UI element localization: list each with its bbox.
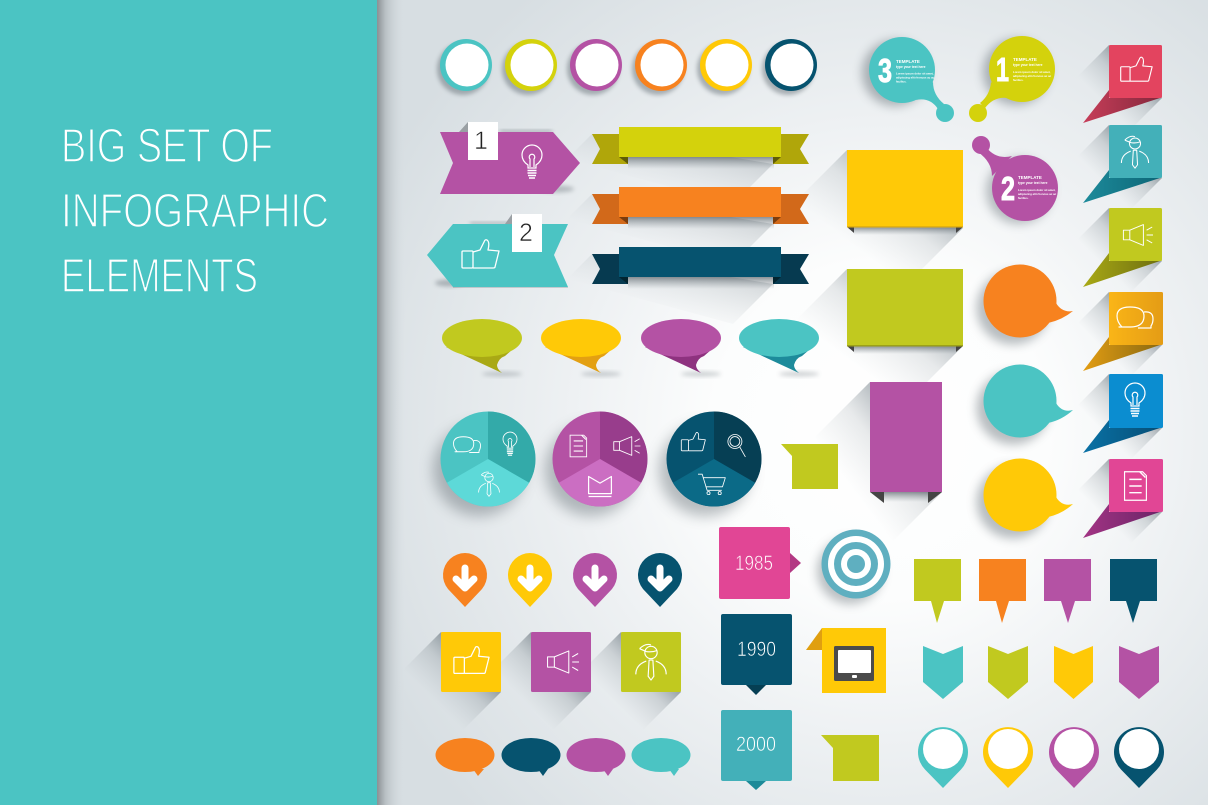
oval bubble: yellow <box>541 319 621 376</box>
icon: bulb <box>522 145 542 178</box>
marker: purple <box>1044 559 1091 623</box>
blob text 1: facilius. <box>1013 78 1024 82</box>
blob text 1: adipiscing elit rhoncus ac ac <box>1013 74 1052 78</box>
timeline card 1985 <box>719 527 801 599</box>
blob text 2: 2 <box>1001 170 1015 207</box>
title <box>61 120 329 303</box>
arrow pin row <box>443 553 682 607</box>
marker: lime <box>914 559 961 623</box>
square: speaker purple <box>531 632 591 692</box>
timeline card 2000 <box>721 710 792 790</box>
location pin: teal <box>918 727 968 788</box>
oval speech bubble row <box>442 319 819 376</box>
blob text 3: Lorem ipsum dolor sit amet, <box>896 72 934 76</box>
number card 2: 2 <box>519 219 533 247</box>
pin: yellow <box>508 553 552 607</box>
oval bubble: lime <box>442 319 522 376</box>
pie icons teal <box>454 432 517 496</box>
square: speaker lime <box>1077 208 1162 293</box>
blob text 3: type your text here <box>896 65 926 69</box>
blob text 1: type your text here <box>1013 63 1043 67</box>
lime flag bottom <box>821 735 879 781</box>
pin: purple <box>573 553 617 607</box>
small lime flag <box>781 444 838 489</box>
pin: navy <box>638 553 682 607</box>
arrow label 2 <box>427 214 568 288</box>
chevron badge row <box>923 646 1159 699</box>
icon squares with tails: right column <box>1077 45 1163 544</box>
blob text 1: Lorem ipsum dolor sit amet, <box>1013 70 1051 74</box>
pie icons purple <box>570 435 640 496</box>
pie circle: teal <box>433 412 536 516</box>
small bubble: orange <box>436 738 494 776</box>
panel: title panel <box>0 0 377 807</box>
circle: navy <box>762 39 817 95</box>
oval bubble: teal <box>739 319 819 376</box>
square: thumbs up red <box>1077 45 1162 130</box>
speech bubble: yellow round <box>976 458 1073 538</box>
blob: template 3 teal <box>862 37 954 122</box>
ribbon: navy <box>567 247 809 324</box>
speech bubble: teal round <box>976 364 1073 444</box>
chevron: lime <box>988 646 1028 699</box>
lime banner rectangle <box>792 269 963 401</box>
blob text 3: TEMPLATE <box>896 59 920 64</box>
oval bubble: purple <box>641 319 721 376</box>
small bubble: navy <box>502 738 560 776</box>
tablet card <box>806 628 886 693</box>
square: thumbs up yellow <box>441 632 501 692</box>
blob text 2: adipiscing elit rhoncus ac ac <box>1018 192 1057 196</box>
circle: yellow <box>697 39 752 95</box>
marker: orange <box>979 559 1026 623</box>
purple banner rectangle <box>815 382 942 547</box>
pie circle: purple <box>545 412 648 516</box>
small bubble: teal <box>632 738 690 776</box>
location pin: purple <box>1049 727 1099 788</box>
pie circle: navy <box>659 412 762 516</box>
blob text 2: TEMPLATE <box>1018 175 1042 180</box>
timeline card 1990: 1990 <box>737 638 776 661</box>
location pin: navy <box>1114 727 1164 788</box>
square: person teal <box>1077 125 1162 210</box>
speech bubble: orange round <box>976 264 1073 344</box>
blob text 2: type your text here <box>1018 181 1048 185</box>
icon: thumbs up <box>462 240 499 268</box>
small bubble: purple <box>566 738 626 776</box>
location pin row <box>918 727 1164 788</box>
timeline card 1985: 1985 <box>735 552 773 575</box>
title: INFOGRAPHIC <box>61 185 329 238</box>
blob text 1: 1 <box>996 51 1009 88</box>
ribbon: orange <box>567 187 809 264</box>
chevron: teal <box>923 646 963 699</box>
square speech marker row <box>914 559 1157 623</box>
marker: navy <box>1110 559 1157 623</box>
number card 2 <box>512 214 542 252</box>
circle: lime <box>502 39 557 95</box>
circle: purple <box>567 39 622 95</box>
square: person lime <box>621 632 681 692</box>
blob text 2 <box>1001 170 1057 207</box>
target icon <box>817 530 890 604</box>
circle: orange <box>632 39 687 95</box>
title: ELEMENTS <box>61 250 258 303</box>
blob text 2: Lorem ipsum dolor sit amet, <box>1018 188 1056 192</box>
blob text 1 <box>996 51 1052 88</box>
blob text 3: 3 <box>878 52 892 89</box>
arrow label 1 <box>440 122 580 194</box>
blob text 3 <box>878 52 935 89</box>
panel shadow <box>377 0 405 807</box>
small oval bubble row <box>436 738 690 776</box>
blob: template 1 lime <box>969 36 1055 122</box>
chevron: yellow <box>1054 646 1093 699</box>
number card 1: 1 <box>474 127 488 155</box>
square: document pink <box>1077 459 1163 544</box>
timeline card 1990 <box>721 614 792 695</box>
timeline card 2000: 2000 <box>736 733 776 756</box>
circle: teal <box>437 39 492 95</box>
circle row <box>437 39 817 95</box>
yellow banner rectangle <box>792 150 963 283</box>
title: BIG SET OF <box>61 120 273 173</box>
chevron: purple <box>1119 646 1159 699</box>
ribbon: lime <box>567 127 809 204</box>
blob text 2: facilius. <box>1018 196 1029 200</box>
pie icons navy <box>681 432 745 495</box>
square: chat orange <box>1077 292 1163 377</box>
square: bulb blue <box>1077 374 1163 460</box>
icon square row <box>401 632 681 732</box>
blob text 3: facilius. <box>896 80 907 84</box>
blob: template 2 purple <box>972 136 1058 224</box>
pin: orange <box>443 553 487 607</box>
blob text 3: adipiscing elit rhoncus ac ac <box>896 76 935 80</box>
icon: tablet <box>834 646 874 681</box>
blob text 1: TEMPLATE <box>1013 57 1037 62</box>
location pin: yellow <box>983 727 1033 788</box>
